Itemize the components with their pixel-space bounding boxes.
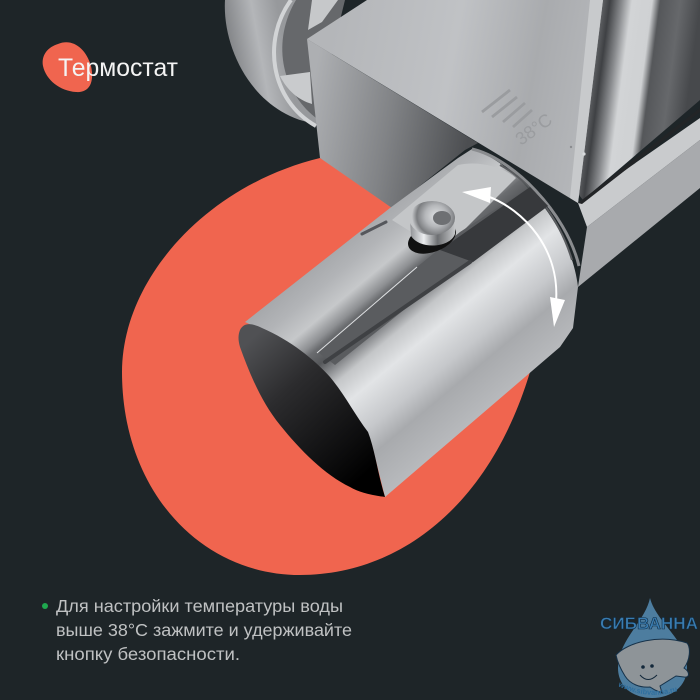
- collar rings: [472, 149, 579, 266]
- rail lower face: [578, 140, 700, 287]
- safety button: [404, 201, 460, 260]
- title text: Термостат: [58, 54, 179, 82]
- logo face: [640, 664, 657, 680]
- logo name: СИБВАННА: [600, 614, 698, 633]
- thermostat product: [225, 0, 700, 497]
- slot highlight: [317, 267, 417, 353]
- temperature scale engraving: [482, 90, 586, 156]
- rotation arrow: [462, 187, 565, 327]
- temperature label: 38°C: [512, 109, 556, 149]
- logo drop: [618, 598, 687, 698]
- pipes behind: [575, 0, 700, 200]
- green bullet: [42, 603, 48, 609]
- title: [43, 42, 179, 92]
- channel shadow near button: [440, 187, 548, 262]
- description: [42, 596, 352, 664]
- logo url: www.sibvanna.ru: [618, 682, 678, 695]
- slot: [325, 262, 470, 362]
- description text: [56, 596, 352, 664]
- large orange blob: [122, 158, 530, 575]
- valve body side face: [307, 39, 478, 208]
- description text: кнопку безопасности.: [56, 644, 240, 664]
- wall knob: [225, 0, 345, 126]
- logo bathtub: [616, 639, 689, 693]
- bottom rail: [578, 118, 700, 227]
- handle end face: [238, 324, 385, 497]
- arrowhead up: [462, 187, 491, 203]
- watermark logo: [600, 598, 698, 698]
- title blob: [43, 42, 92, 92]
- arrowhead down: [550, 297, 565, 327]
- top plate: [392, 163, 516, 250]
- dark channel: [318, 187, 548, 365]
- description text: Для настройки температуры воды: [56, 596, 343, 616]
- description text: выше 38°С зажмите и удерживайте: [56, 620, 352, 640]
- thermostat handle cylinder: [245, 149, 578, 497]
- valve body top face: [307, 0, 603, 203]
- indicator mark: [362, 222, 386, 234]
